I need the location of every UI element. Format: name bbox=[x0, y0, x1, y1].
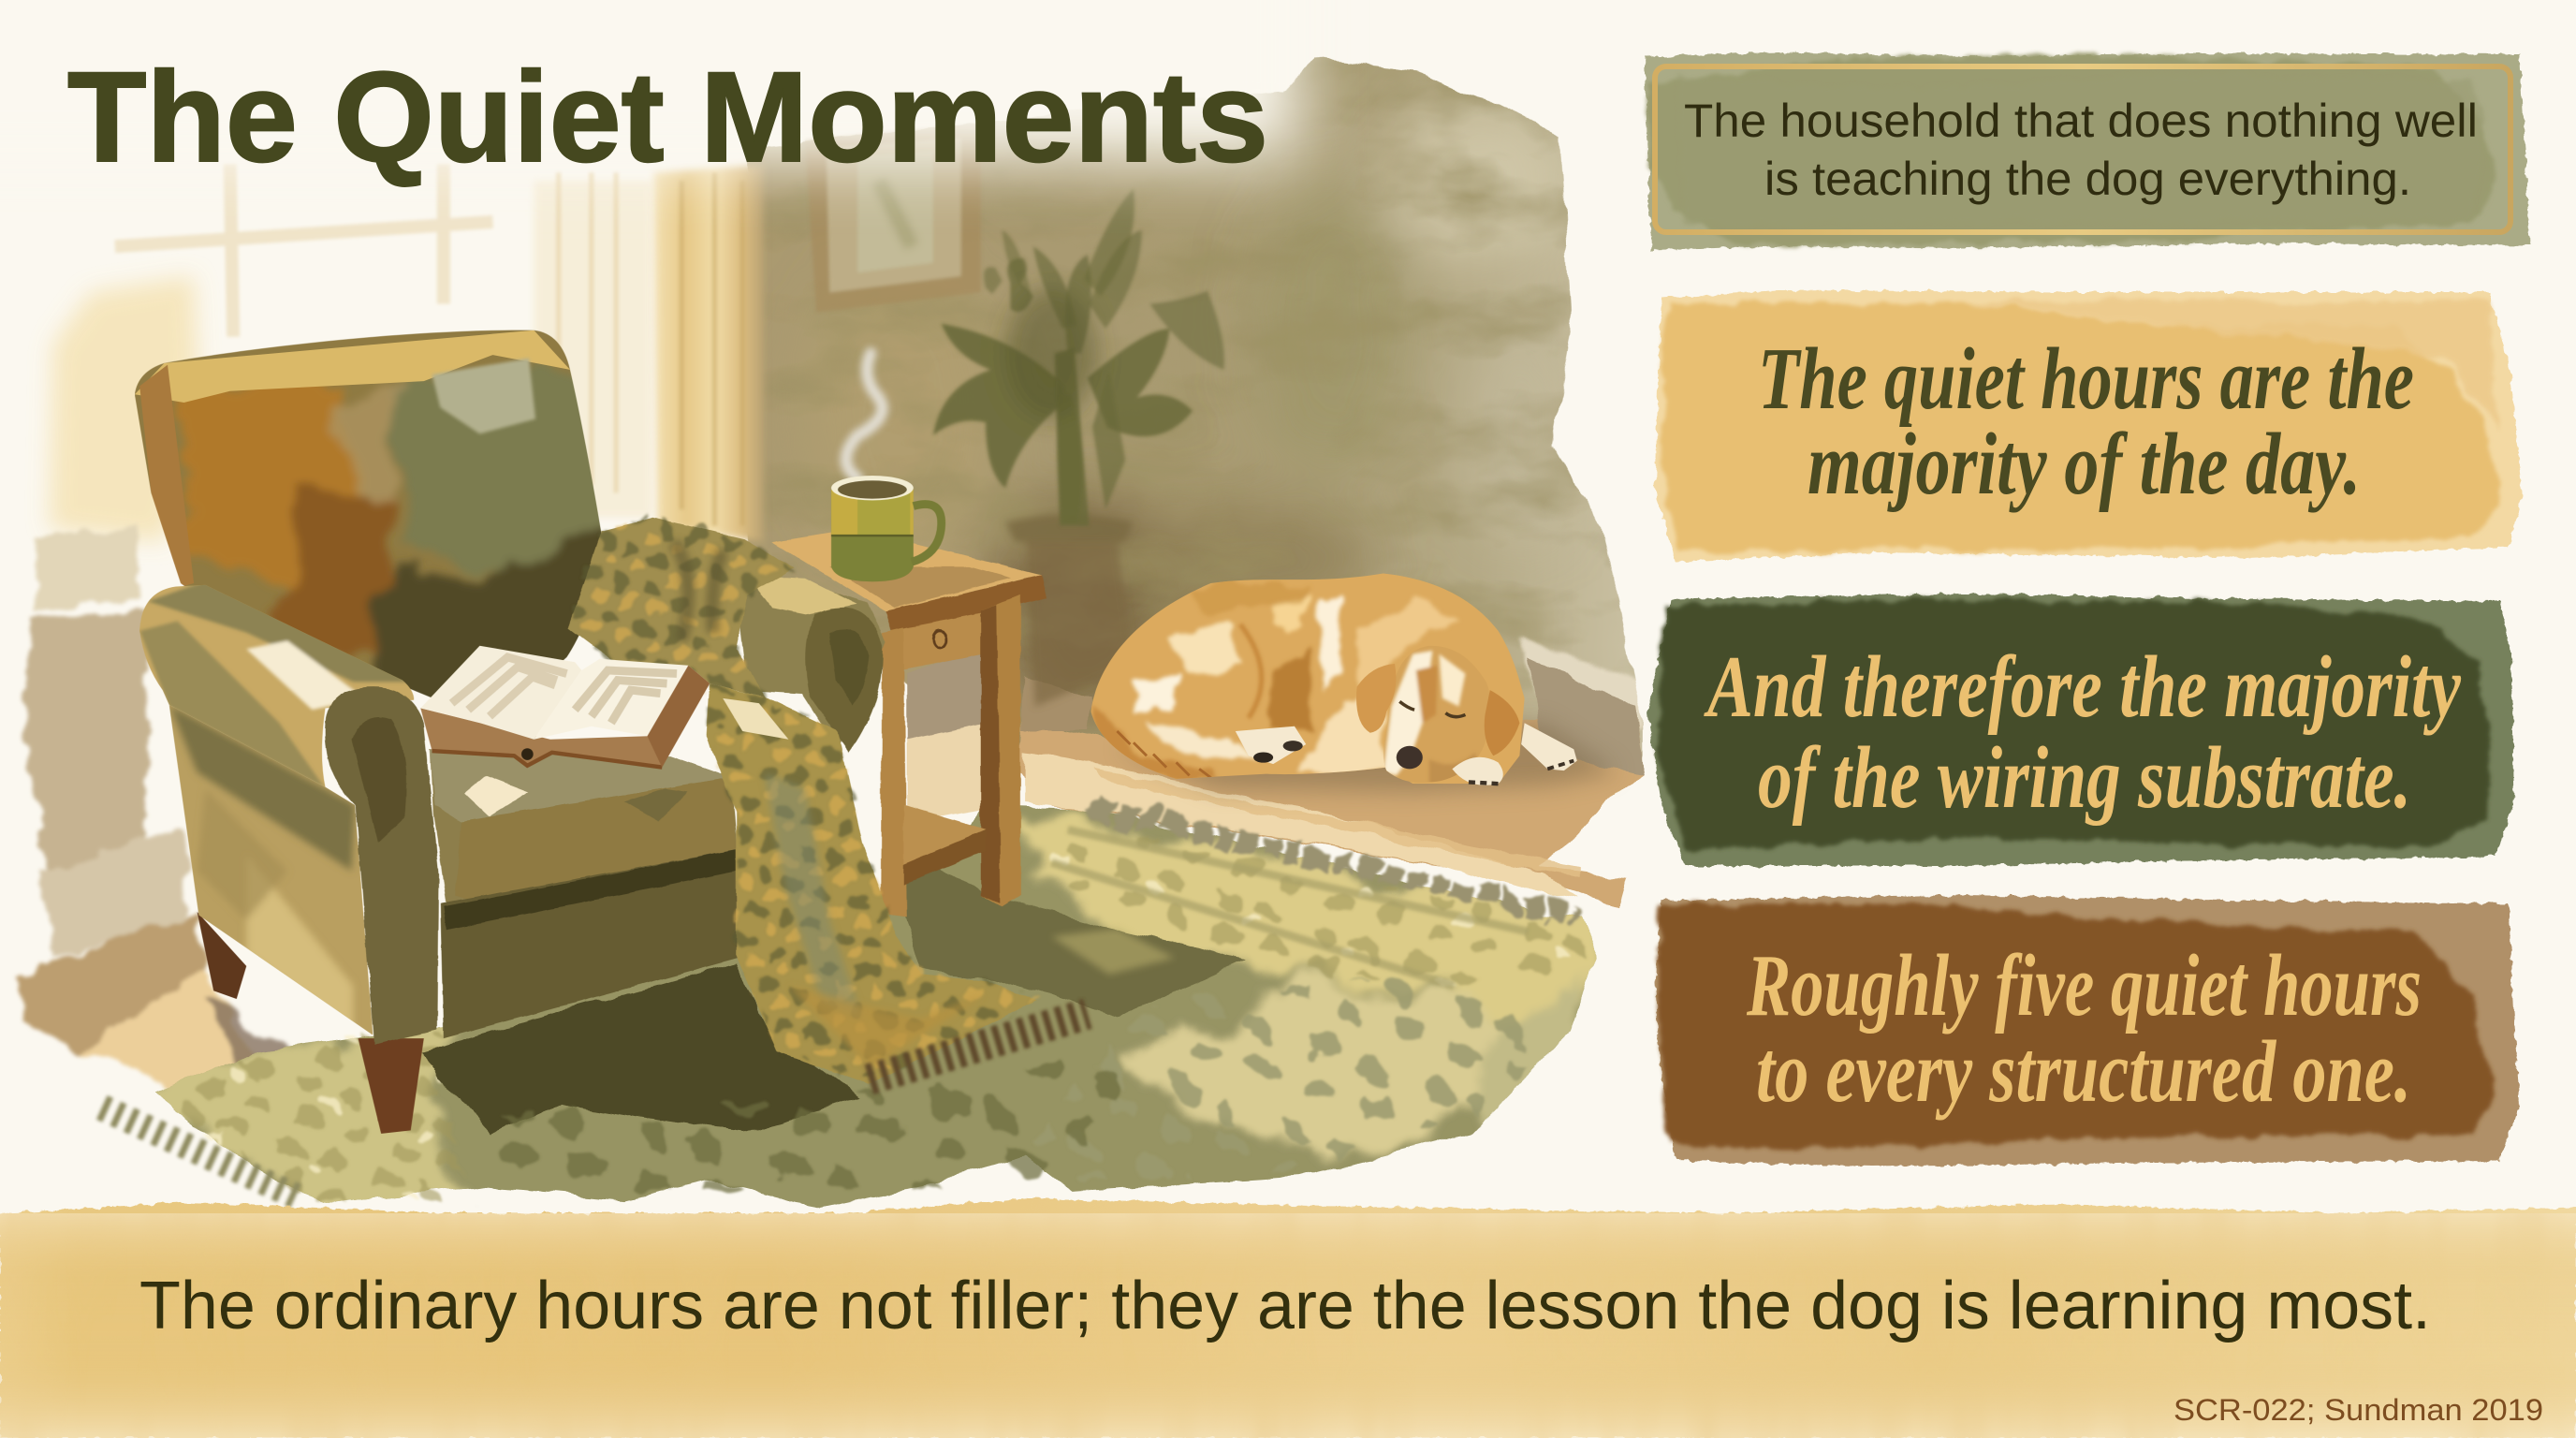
side panel bbox=[148, 690, 394, 1051]
left arm top bbox=[131, 575, 427, 797]
framed picture bbox=[805, 124, 981, 312]
title: The Quiet Moments bbox=[67, 46, 1268, 189]
floor bbox=[1018, 657, 1645, 907]
plant bbox=[933, 189, 1224, 707]
bottom banner bbox=[0, 1198, 2576, 1438]
left rug fringe bbox=[102, 1108, 296, 1196]
wiring substrate text bbox=[1704, 638, 2461, 827]
top fade behind title bbox=[0, 0, 1297, 161]
mug with steam bbox=[831, 353, 942, 581]
throw upper fold bbox=[568, 518, 795, 697]
quiet hours text bbox=[1758, 330, 2414, 513]
sleeping dog bbox=[1076, 566, 1618, 797]
quiet hours text: majority of the day. bbox=[1808, 416, 2361, 513]
five quiet hours text bbox=[1746, 937, 2422, 1121]
chair legs bbox=[198, 912, 424, 1134]
window light, frame and pale curtains bbox=[50, 165, 764, 542]
dog paws bbox=[1236, 723, 1577, 785]
panel: the household callout bbox=[1645, 52, 2529, 250]
throw blanket bbox=[568, 518, 1088, 1084]
panel: five quiet hours bbox=[1655, 895, 2520, 1167]
banner text: The ordinary hours are not filler; they are the lesson the dog is learning most. bbox=[139, 1269, 2431, 1343]
dog ears bbox=[1356, 664, 1396, 733]
shadow under chair bbox=[419, 962, 861, 1134]
back wall wash bbox=[739, 50, 1660, 788]
rug bbox=[102, 788, 1610, 1216]
dog body bbox=[1076, 566, 1536, 788]
rug base bbox=[131, 788, 1610, 1216]
panel: quiet hours bbox=[1655, 290, 2523, 562]
dark rug panel bbox=[895, 868, 1245, 1019]
callout text: is teaching the dog everything. bbox=[1764, 153, 2411, 205]
wiring substrate text: of the wiring substrate. bbox=[1758, 729, 2411, 827]
lower left wall and floor wash bbox=[17, 526, 296, 1093]
source note: SCR-022; Sundman 2019 bbox=[2174, 1393, 2543, 1427]
callout text bbox=[1684, 95, 2478, 205]
right rug fringe bbox=[1092, 808, 1577, 917]
dog eyes and nose bbox=[1399, 701, 1465, 717]
panel: wiring substrate bbox=[1647, 594, 2514, 866]
callout text: The household that does nothing well bbox=[1684, 95, 2478, 147]
seat bbox=[431, 749, 738, 1038]
throw drape bbox=[707, 683, 1036, 1084]
armchair bbox=[115, 312, 886, 1134]
gold frame bbox=[1655, 66, 2510, 232]
open book bbox=[420, 646, 710, 768]
dog head bbox=[1356, 633, 1519, 797]
illustration: living room with armchair and sleeping dog bbox=[0, 0, 1660, 1216]
throw fringe bbox=[869, 1014, 1088, 1079]
right arm bbox=[736, 575, 886, 753]
side table bbox=[772, 529, 1046, 917]
steam bbox=[846, 353, 883, 478]
left arm roll bbox=[325, 687, 439, 1045]
chair back bbox=[135, 330, 601, 697]
